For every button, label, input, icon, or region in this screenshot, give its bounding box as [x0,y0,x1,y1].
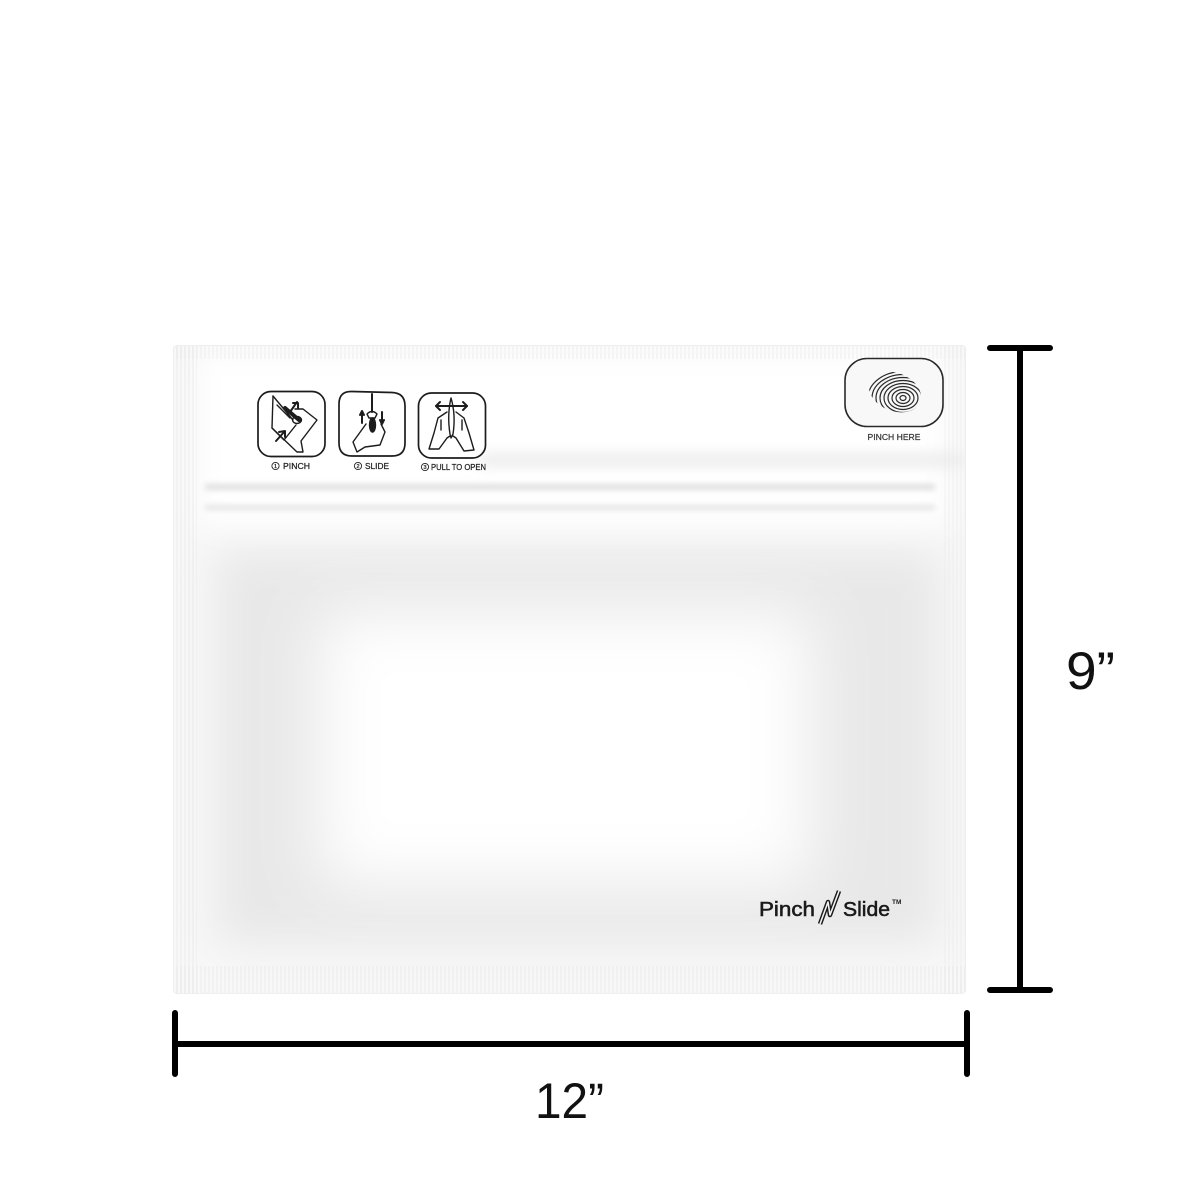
logo: Pinch N Slide: TM [892,899,901,906]
bag [173,345,966,994]
label: pinch: PINCH [283,461,310,471]
label: pull to open: 3 [423,465,427,471]
decorative film shading [215,550,940,945]
label: pinch here: PINCH HERE [868,432,921,442]
dimension: height 9 inches [990,348,1115,990]
label: slide [354,461,389,471]
icon: step 3 pull to open [418,393,486,458]
label: slide: 2 [356,464,360,470]
icon: step 1 pinch [258,392,325,456]
logo: Pinch N Slide: Slide [843,898,890,921]
icon: pinch here fingerprint [845,358,943,426]
icon: step 2 slide [339,391,405,456]
label: pinch: 1 [274,464,277,470]
label: 12 inches: 12” [535,1073,604,1129]
logo: Pinch N Slide [759,891,901,924]
logo: Pinch N Slide: Pinch [759,898,815,921]
label: pinch [272,461,310,471]
dimension: width 12 inches [175,1013,967,1129]
label: pull to open: PULL TO OPEN [431,462,486,472]
label: slide: SLIDE [365,461,389,471]
label: 9 inches: 9” [1066,642,1115,701]
